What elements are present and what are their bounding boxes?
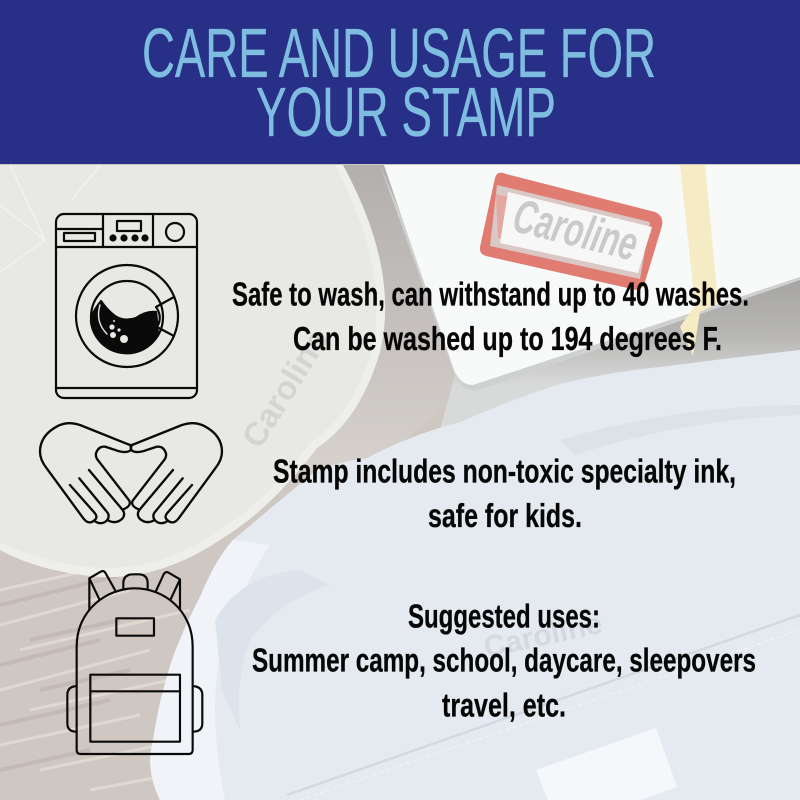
backpack fabric: Caroline — [481, 607, 605, 664]
title — [142, 14, 656, 151]
text block: suggested uses: Suggested uses: — [408, 598, 600, 634]
title: YOUR STAMP — [256, 73, 556, 151]
background photo scene — [0, 160, 800, 800]
text block: washing — [232, 276, 749, 357]
title band — [0, 0, 800, 164]
icon: backpack — [67, 571, 202, 754]
text block: suggested uses: travel, etc. — [442, 686, 566, 724]
plate — [0, 165, 385, 577]
text block: suggested uses — [252, 598, 756, 724]
text block: non-toxic ink — [273, 452, 736, 534]
icon: heart hands — [40, 423, 222, 523]
backpack fabric — [150, 350, 800, 800]
notebook — [380, 165, 800, 391]
icon: washing machine — [56, 214, 197, 398]
stamp: Caroline — [508, 190, 643, 271]
plate: Caroline — [234, 322, 336, 454]
stamp — [480, 173, 662, 290]
text block: non-toxic ink: safe for kids. — [428, 497, 582, 534]
